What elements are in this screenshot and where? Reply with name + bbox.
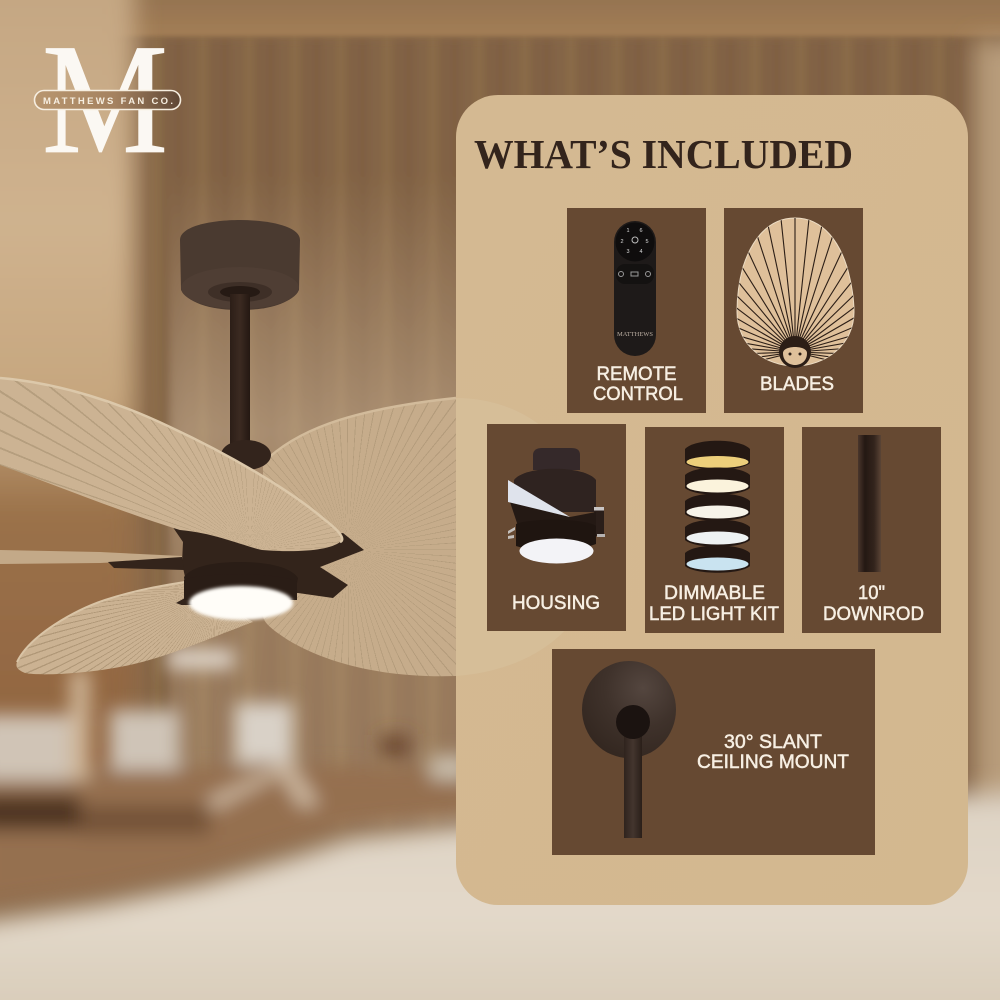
fan blade: right [263, 396, 456, 676]
cool light ring [685, 520, 750, 547]
label: 10 inch downrod: DOWNROD [823, 604, 924, 625]
fan mount, downrod and motor hardware [108, 220, 364, 605]
icon: downrod [858, 435, 881, 572]
icon: ceiling mount [582, 661, 676, 838]
neutral light ring [685, 494, 750, 521]
label: dimmable LED light kit: DIMMABLE [664, 583, 765, 604]
fan blade: upper left [0, 376, 344, 552]
icon: remote: 2 [620, 239, 624, 245]
label: remote control [593, 364, 683, 405]
logo name badge [34, 90, 180, 110]
label: housing: HOUSING [512, 593, 600, 614]
fan LED light [184, 580, 297, 622]
motor housing [184, 562, 298, 594]
card: 10 inch downrod [802, 427, 941, 633]
ceiling canopy [180, 220, 300, 310]
logo: Matthews Fan Co. [34, 44, 182, 156]
label: slant ceiling mount: 30° SLANT [724, 732, 822, 753]
icon: remote: 5 [645, 239, 649, 245]
label: blades: BLADES [760, 374, 834, 395]
panel: what's included [456, 95, 968, 905]
downrod [230, 294, 250, 449]
label: slant ceiling mount: CEILING MOUNT [697, 752, 849, 773]
icon: palm blade [736, 218, 854, 368]
icon: remote: 4 [639, 249, 643, 255]
fan blade: lower left [16, 581, 253, 674]
soft light ring [685, 468, 750, 495]
card: slant ceiling mount [552, 649, 875, 855]
icon: LED light stack [685, 441, 750, 573]
label: dimmable LED light kit [649, 583, 779, 625]
logo name badge: MATTHEWS FAN CO. [43, 96, 173, 107]
icon: housing [508, 448, 605, 564]
label: slant ceiling mount [697, 732, 849, 773]
icon: remote: 3 [626, 249, 630, 255]
icon: remote: 1 [626, 228, 630, 234]
rug and dark floor area [0, 765, 470, 905]
blade arms [108, 520, 364, 610]
card: dimmable LED light kit [645, 427, 784, 633]
label: dimmable LED light kit: LED LIGHT KIT [649, 604, 779, 625]
title: WHAT’S INCLUDED [474, 131, 853, 177]
label: 10 inch downrod [823, 583, 924, 625]
card: remote control [567, 208, 706, 413]
label: remote control: REMOTE [596, 364, 676, 385]
icon: remote: 6 [639, 228, 643, 234]
icon: remote: MATTHEWS [617, 331, 653, 338]
icon: remote [614, 221, 656, 356]
warm light ring [685, 441, 750, 470]
card: housing [487, 424, 626, 631]
daylight ring [685, 546, 750, 573]
label: remote control: CONTROL [593, 384, 683, 405]
fan blade: left edge-on [0, 550, 182, 564]
card: blades [724, 208, 863, 413]
motor top [221, 440, 271, 470]
label: 10 inch downrod: 10" [858, 583, 885, 604]
